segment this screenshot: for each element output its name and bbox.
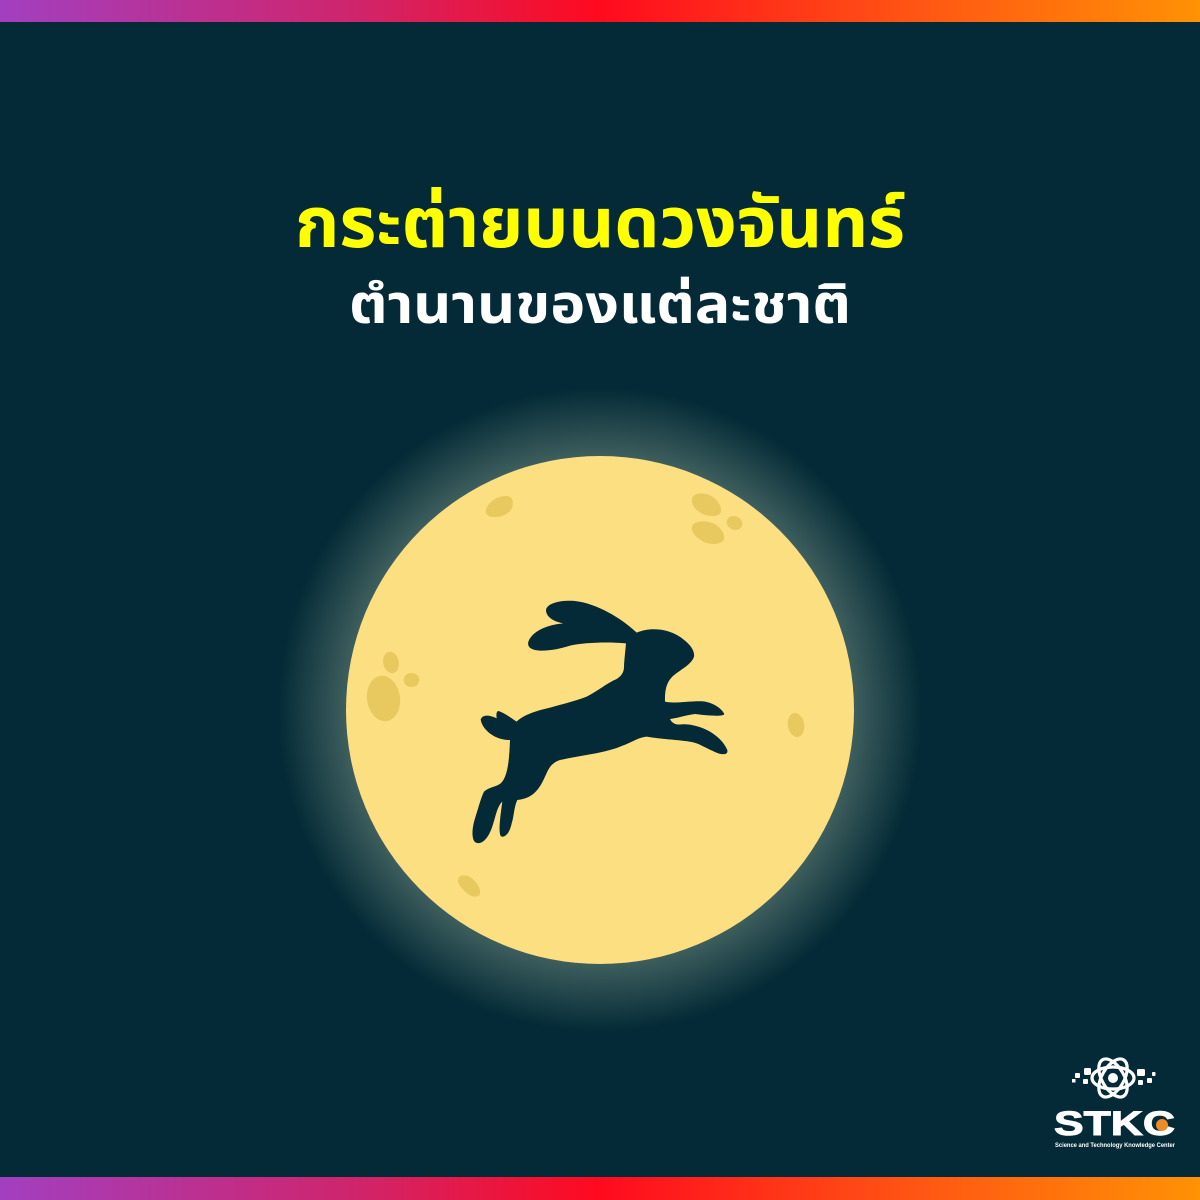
icon: atom emblem [1092, 1054, 1134, 1102]
logo orange dot [1156, 1119, 1168, 1131]
rabbit silhouette [472, 601, 727, 843]
subtitle: ตำนานของแต่ละชาติ [349, 267, 851, 348]
craters: top left [486, 496, 513, 517]
icon: data dots right [1137, 1069, 1156, 1085]
title: กระต่ายบนดวงจันทร์ [295, 173, 905, 279]
STKC logo [1054, 1054, 1176, 1149]
crater: bottom left [458, 875, 480, 897]
top gradient bar [0, 0, 1200, 22]
logo wordmark: STKC [1054, 1105, 1175, 1143]
moon disc [346, 456, 854, 964]
moon with craters and rabbit [346, 456, 854, 964]
moon glow [278, 388, 922, 1032]
craters: left cluster [364, 650, 419, 723]
bottom gradient bar [0, 1177, 1200, 1200]
icon: data dots left [1072, 1068, 1091, 1084]
logo tagline: Science and Technology Knowledge Center [1055, 1143, 1176, 1149]
crater: right [786, 712, 806, 738]
craters: top right cluster [692, 493, 745, 544]
